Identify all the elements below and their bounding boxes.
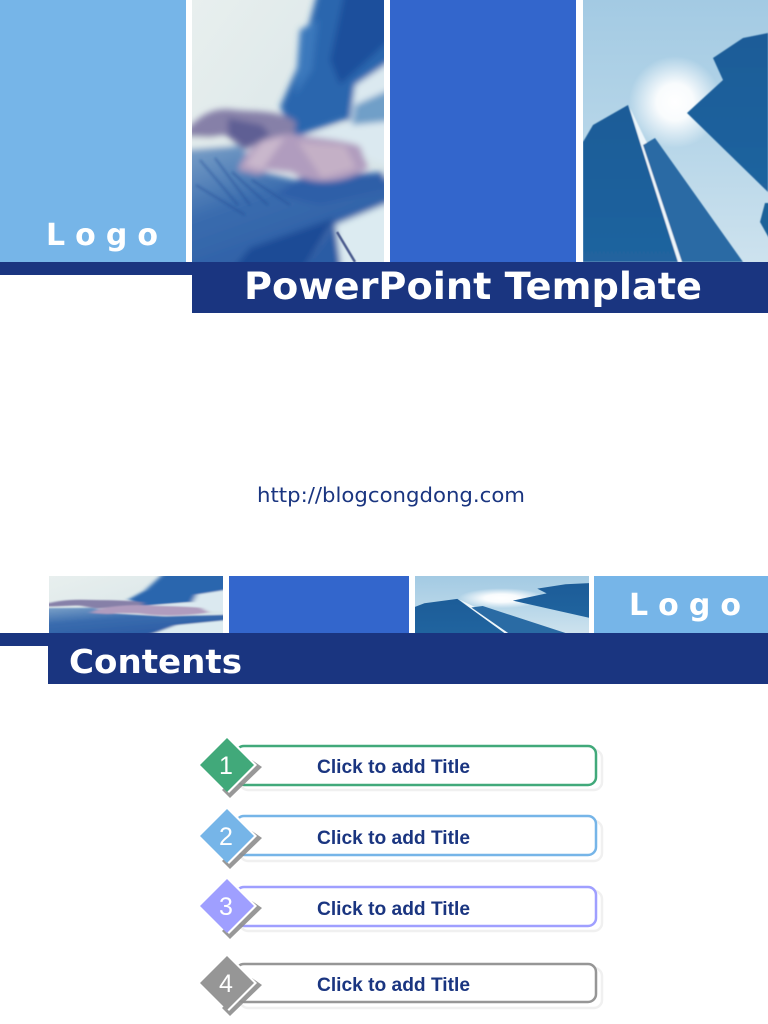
list item 2 [200,808,602,869]
photo: skyscrapers and sun [583,0,768,262]
list item 3 [200,878,602,939]
blue panel: top [390,0,576,262]
logo panel: top: L o g o [46,218,158,253]
icon: diamond 4: 4 [219,970,233,998]
icon: diamond 2: 2 [219,823,233,851]
small photo: hands on keyboard [49,576,223,633]
small photo: skyscrapers and sun [415,576,589,633]
url text: http://blogcongdong.com [257,483,525,507]
blue panel: small [229,576,409,633]
list item 1: Click to add Title [317,757,470,778]
logo panel: small: L o g o [629,588,741,623]
logo panel: top [0,0,186,262]
list item 2: Click to add Title [317,828,470,849]
list item 4 [200,955,602,1016]
list item 1 [200,737,602,798]
heading: PowerPoint Template: PowerPoint Template [244,265,702,308]
contents band [0,633,768,684]
icon: diamond 1: 1 [219,752,233,780]
icon: diamond 3 [200,879,254,933]
icon: diamond 2 [200,809,254,863]
icon: diamond 4 [200,956,254,1010]
icon: diamond 1 [200,738,254,792]
logo panel: small [594,576,768,633]
photo: hands on keyboard [192,0,384,262]
icon: diamond 3: 3 [219,893,233,921]
list item 4: Click to add Title [317,975,470,996]
heading: Contents: Contents [69,642,242,681]
list item 3: Click to add Title [317,899,470,920]
title band [0,262,768,313]
